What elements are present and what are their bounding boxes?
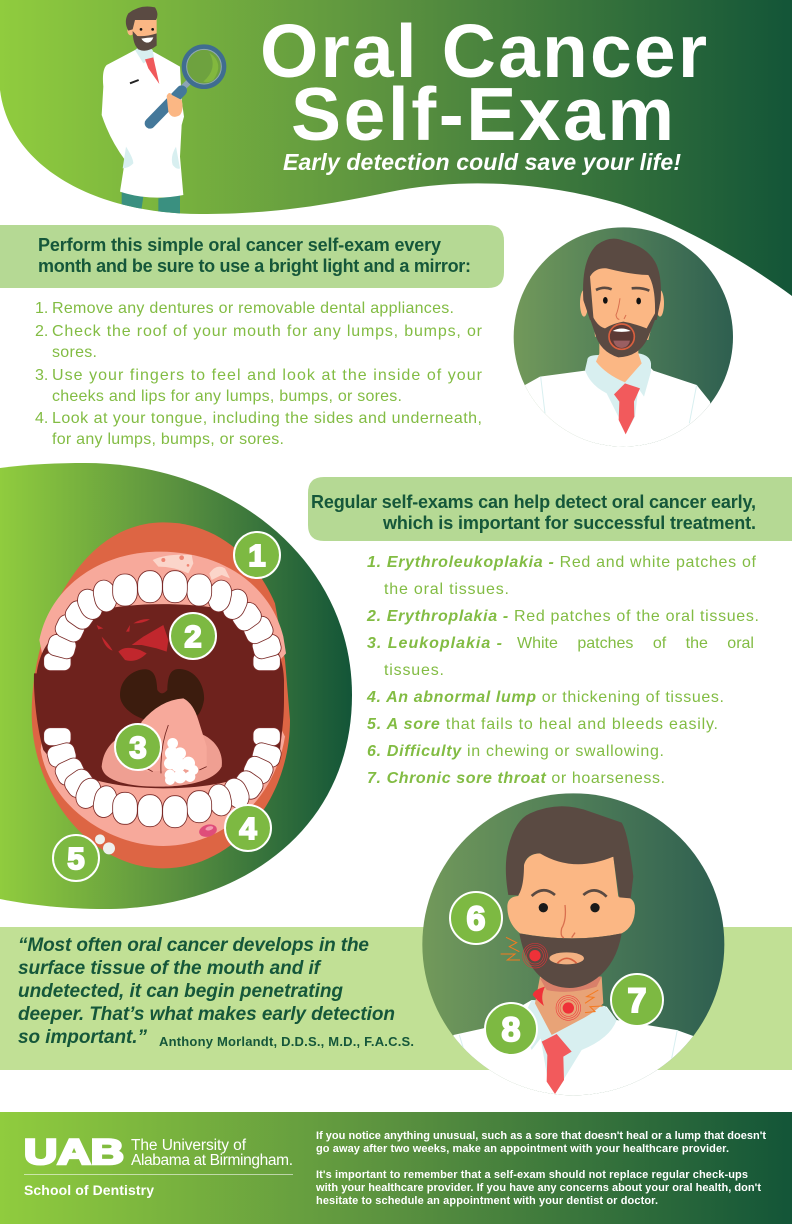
title: Self-Exam xyxy=(291,72,674,156)
icon: doctor with magnifying glass xyxy=(102,6,224,217)
text block: self-exam steps: cheeks and lips for any lumps, bumps, or sores. xyxy=(52,388,402,405)
title: Oral Cancer xyxy=(260,9,707,93)
badge 1 xyxy=(234,532,280,578)
badge 4 xyxy=(225,805,271,851)
panel: self-exam benefit heading: which is important for successful treatment. xyxy=(382,513,756,533)
badge 3: 3 xyxy=(129,730,147,765)
text block: self-exam steps: for any lumps, bumps, or sores. xyxy=(52,431,284,448)
text block: footer notes: If you notice anything unusual, such as a sore that doesn't heal or a lump that doesn't xyxy=(316,1130,766,1142)
badge 7 xyxy=(611,974,663,1026)
logo: UAB: Alabama at Birmingham. xyxy=(131,1152,293,1169)
text block: quote: “Most often oral cancer develops in the xyxy=(18,935,369,956)
text block: warning signs list: tissues. xyxy=(384,662,444,679)
text block: self-exam steps: 4. xyxy=(35,410,48,427)
text block: quote: so important.” xyxy=(18,1027,148,1048)
title xyxy=(260,9,707,156)
subtitle: Early detection could save your life! xyxy=(283,149,681,175)
text block: self-exam steps: sores. xyxy=(52,344,97,361)
text block: self-exam steps: Check the roof of your mouth for any lumps, bumps, or xyxy=(52,323,483,340)
badge 7: 7 xyxy=(628,982,646,1020)
panel: self-exam instruction heading: month and be sure to use a bright light and a mirror: xyxy=(38,256,471,276)
text block: warning signs list: the oral tissues. xyxy=(384,581,509,598)
text block: quote: deeper. That’s what makes early detection xyxy=(18,1004,395,1025)
text block: self-exam steps: Look at your tongue, including the sides and underneath, xyxy=(52,410,482,427)
panel: self-exam instruction heading xyxy=(0,225,504,288)
footer band xyxy=(0,1112,792,1224)
text block: warning signs list: 3. Leukoplakia - xyxy=(367,635,502,652)
text block: self-exam steps: Remove any dentures or removable dental appliances. xyxy=(52,300,454,317)
panel: self-exam benefit heading xyxy=(308,477,792,541)
text block: quote: surface tissue of the mouth and if xyxy=(18,958,322,979)
text block: warning signs list: White patches of the oral xyxy=(517,635,754,652)
panel: self-exam instruction heading: Perform this simple oral cancer self-exam every xyxy=(38,235,441,255)
text block: warning signs list: 5. A sore that fails to heal and bleeds easily. xyxy=(367,716,718,733)
panel: self-exam benefit heading: Regular self-exams can help detect oral cancer early, xyxy=(311,492,756,512)
panel: mouth illustration background xyxy=(0,463,352,909)
logo: UAB: The University of xyxy=(131,1137,247,1154)
badge 3 xyxy=(115,724,161,770)
logo: UAB xyxy=(24,1133,293,1198)
icon: man with throat pain xyxy=(422,793,724,1097)
badge 5 xyxy=(53,835,99,881)
text block: self-exam steps: 1. xyxy=(35,300,48,317)
badge 8 xyxy=(485,1003,537,1055)
text block: footer notes: go away after two weeks, make an appointment with your healthcare provider. xyxy=(316,1143,729,1155)
header banner xyxy=(0,0,792,296)
badge 8: 8 xyxy=(502,1011,520,1049)
badge 6 xyxy=(450,892,502,944)
text block: warning signs list: 6. Difficulty in chewing or swallowing. xyxy=(367,743,664,760)
text block: footer notes: with your healthcare provider. If you have any concerns about your oral health, don't xyxy=(315,1182,761,1194)
icon: man with open mouth xyxy=(513,227,733,453)
text block: quote: Anthony Morlandt, D.D.S., M.D., F.A.C.S. xyxy=(159,1034,414,1049)
logo: UAB: UAB xyxy=(24,1133,124,1172)
text block: self-exam steps xyxy=(35,300,483,448)
badge 6: 6 xyxy=(467,900,485,938)
text block: quote: undetected, it can begin penetrating xyxy=(18,981,343,1002)
badge 5: 5 xyxy=(67,841,85,876)
text block: self-exam steps: 3. xyxy=(35,367,48,384)
text block: footer notes xyxy=(315,1130,766,1207)
icon: open mouth with teeth xyxy=(32,522,290,868)
text block: warning signs list: 1. Erythroleukoplakia - Red and white patches of xyxy=(367,554,757,571)
badge 4: 4 xyxy=(239,811,257,846)
text block: warning signs list: 4. An abnormal lump or thickening of tissues. xyxy=(366,689,724,706)
text block: footer notes: hesitate to schedule an appointment with your dentist or doctor. xyxy=(316,1195,658,1207)
text block: quote xyxy=(18,935,414,1049)
text block: warning signs list: 7. Chronic sore throat or hoarseness. xyxy=(367,770,665,787)
panel: quote band xyxy=(0,927,792,1070)
badge 2 xyxy=(170,613,216,659)
badge 1: 1 xyxy=(248,538,266,573)
text block: self-exam steps: 2. xyxy=(35,323,48,340)
text block: warning signs list: 2. Erythroplakia - Red patches of the oral tissues. xyxy=(366,608,759,625)
logo: UAB: School of Dentistry xyxy=(24,1182,154,1198)
badge 2: 2 xyxy=(184,619,202,654)
text block: self-exam steps: Use your fingers to feel and look at the inside of your xyxy=(52,367,483,384)
text block: footer notes: It's important to remember that a self-exam should not replace regular check-ups xyxy=(316,1169,748,1181)
text block: warning signs list xyxy=(366,554,759,787)
